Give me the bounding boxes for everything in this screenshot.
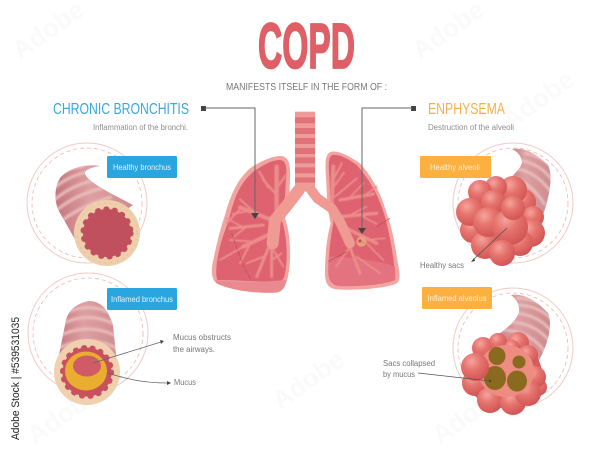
- airway tube: [55, 165, 133, 238]
- airway tube: [59, 301, 116, 357]
- subtitle: MANIFESTS ITSELF IN THE FORM OF :: [226, 82, 387, 93]
- stock id: Adobe Stock | #539531035: [10, 317, 22, 440]
- airway cross-section with mucus: [54, 339, 120, 405]
- panel: healthy bronchus: [27, 143, 147, 266]
- callout: healthy sacs: [420, 228, 507, 270]
- arrow: enphysema to lung: [358, 106, 416, 234]
- lungs illustration: [212, 112, 400, 293]
- callout: mucus obstructs: [93, 333, 231, 363]
- callout: mucus: [107, 373, 196, 387]
- panel: inflamed bronchus: [28, 273, 148, 405]
- label: healthy alveoli: Healthy alveoli: [430, 163, 480, 172]
- carina notch: [299, 199, 315, 215]
- watermark: Adobe: [266, 344, 350, 415]
- trachea: [295, 112, 315, 192]
- mucus spot: [356, 237, 366, 247]
- label: healthy bronchus: Healthy bronchus: [113, 163, 171, 172]
- watermark: Adobe: [21, 379, 105, 450]
- callout: healthy sacs: Healthy sacs: [420, 261, 464, 270]
- title: COPD: [258, 10, 355, 82]
- right lung: [325, 152, 400, 290]
- watermark: Adobe: [496, 64, 580, 135]
- heading: chronic bronchitis: CHRONIC BRONCHITIS: [53, 101, 189, 118]
- airway tube: [500, 294, 550, 360]
- label: inflamed bronchus: Inflamed bronchus: [111, 295, 173, 304]
- arrow: bronchitis to lung: [201, 106, 259, 219]
- callout: mucus obstructs: the airways.: [173, 345, 215, 354]
- heading: enphysema: [428, 101, 514, 132]
- callout: mucus obstructs: Mucus obstructs: [173, 333, 231, 342]
- callout: sacs collapsed: by mucus: [383, 370, 415, 379]
- callout: sacs collapsed: Sacs collapsed: [383, 359, 435, 368]
- heading: chronic bronchitis: [53, 101, 189, 132]
- label: healthy alveoli: [420, 156, 491, 178]
- callout: mucus: Mucus: [174, 378, 196, 387]
- panel: inflamed alveolus: [453, 288, 573, 415]
- heading: enphysema: ENPHYSEMA: [428, 101, 506, 118]
- bronchi: [273, 191, 350, 243]
- label: healthy bronchus: [107, 156, 177, 178]
- watermark: Adobe: [426, 379, 510, 450]
- airway tube: [512, 148, 550, 214]
- alveolar cluster: [456, 176, 545, 266]
- label: inflamed bronchus: [107, 288, 177, 310]
- label: inflamed alveolus: [422, 287, 492, 309]
- airway cross-section: [74, 200, 140, 266]
- callout: sacs collapsed: [383, 359, 491, 382]
- alveolar cluster with collapsed sacs: [461, 332, 547, 415]
- heading: chronic bronchitis: Inflammation of the bronchi.: [93, 123, 188, 132]
- label: inflamed alveolus: Inflamed alveolus: [428, 294, 486, 303]
- panel: healthy alveoli: [453, 143, 573, 266]
- heading: enphysema: Destruction of the alveoli: [428, 123, 514, 132]
- left lung: [212, 156, 290, 293]
